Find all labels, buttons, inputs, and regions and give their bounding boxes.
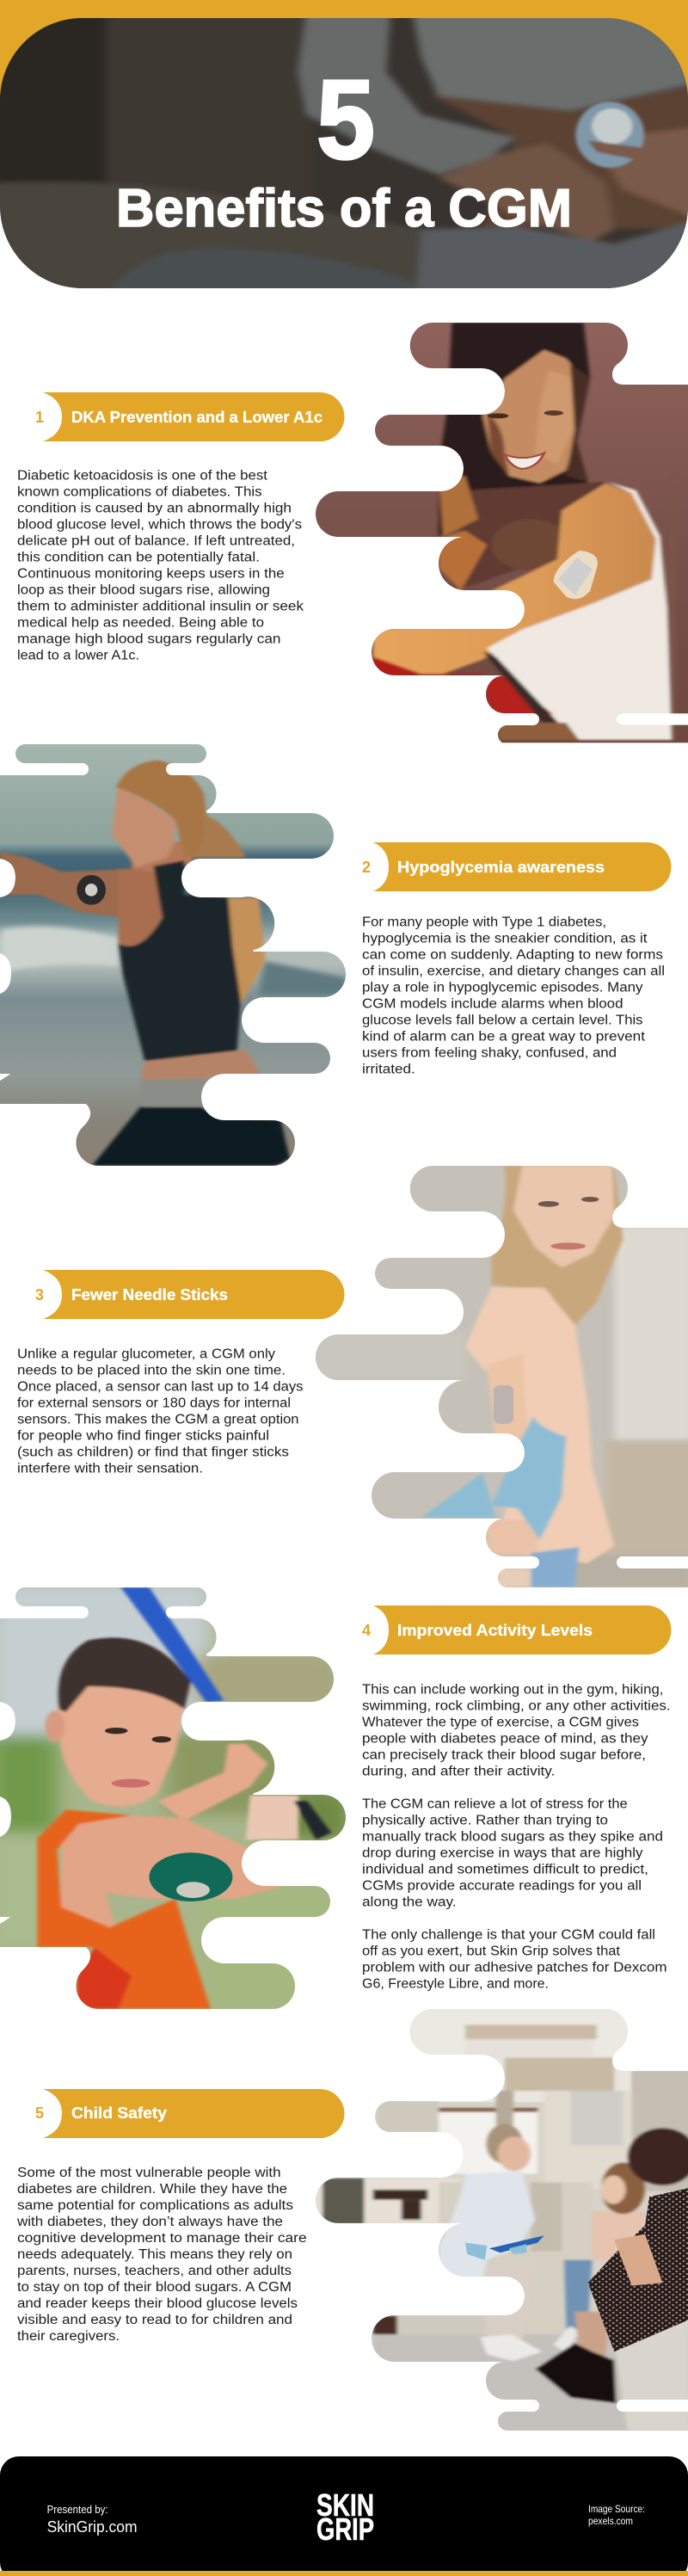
title: 5: 5: [316, 56, 375, 182]
heading 3: [35, 1270, 344, 1319]
body text 5: diabetes are children. While they have the: [17, 2182, 287, 2197]
heading 1: [35, 392, 344, 441]
body text 3: Once placed, a sensor can last up to 14 days: [17, 1379, 304, 1394]
presented by: SkinGrip.com: [47, 2518, 138, 2536]
icon: sensor: [575, 102, 654, 168]
photo panel 4: boy with baseball bat and sensor: [0, 1583, 353, 2013]
image source: Image Source:: [588, 2503, 645, 2515]
body text 2: glucose levels fall below a certain level. This: [362, 1014, 643, 1028]
body text 2: [362, 915, 665, 1077]
heading 4: [362, 1605, 671, 1655]
body text 4: during, and after their activity.: [362, 1764, 555, 1778]
logo: Skin Grip: GRIP: [316, 2511, 374, 2547]
body text 1: loop as their blood sugars rise, allowing: [17, 583, 270, 598]
heading 3: Fewer Needle Sticks: [71, 1286, 228, 1303]
title: Benefits of a CGM: Benefits of a CGM: [116, 179, 572, 238]
body text 3: for people who find finger sticks painful: [17, 1428, 269, 1443]
body text 4: Whatever the type of exercise, a CGM gives: [362, 1715, 639, 1729]
body text 2: irritated.: [362, 1063, 415, 1077]
body text 4: G6, Freestyle Libre, and more.: [362, 1976, 549, 1991]
body text 5: [16, 2166, 307, 2344]
face details: [538, 1197, 599, 1249]
icon: arm sensor: [554, 551, 598, 599]
footer: [0, 2456, 688, 2576]
body text 1: them to administer additional insulin or seek: [17, 600, 304, 614]
body text 1: lead to a lower A1c.: [17, 649, 139, 663]
body text 4: problem with our adhesive patches for Dexcom: [362, 1960, 667, 1975]
body text 4: [362, 1682, 671, 1991]
body text 2: play a role in hypoglycemic episodes. Many: [362, 981, 643, 995]
heading 5: [35, 2089, 344, 2138]
body text 3: [17, 1347, 304, 1476]
body text 5: visible and easy to read to for children and: [17, 2313, 292, 2327]
heading 4: Improved Activity Levels: [397, 1622, 593, 1639]
face details: [105, 1728, 171, 1788]
body text 1: Diabetic ketoacidosis is one of the best: [17, 469, 268, 484]
body text 2: users from feeling shaky, confused, and: [362, 1046, 617, 1061]
heading 2: Hypoglycemia awareness: [397, 859, 605, 876]
body text 5: parents, nurses, teachers, and other adults: [17, 2264, 292, 2278]
heading 4: 4: [362, 1622, 371, 1639]
body text 3: needs to be placed into the skin one time.: [17, 1363, 286, 1377]
image source: pexels.com: [588, 2515, 633, 2527]
presented by: [47, 2503, 138, 2536]
body text 4: This can include working out in the gym, hiking,: [362, 1682, 663, 1697]
body text 3: sensors. This makes the CGM a great option: [17, 1412, 299, 1427]
body text 2: hypoglycemia is the sneakier condition, as it: [362, 932, 648, 946]
body text 2: CGM models include alarms when blood: [362, 997, 623, 1012]
body text 1: Continuous monitoring keeps users in the: [17, 567, 285, 582]
body text 4: swimming, rock climbing, or any other activities.: [362, 1698, 671, 1713]
heading 5: 5: [35, 2105, 44, 2122]
body text 1: medical help as needed. Being able to: [17, 616, 264, 631]
body text 1: delicate pH out of balance. If left untreated,: [17, 534, 295, 549]
body text 1: this condition can be potentially fatal.: [17, 551, 260, 565]
body text 1: manage high blood sugars regularly can: [17, 632, 280, 647]
logo: Skin Grip: [316, 2487, 374, 2547]
body text 5: same potential for complications as adults: [17, 2198, 293, 2213]
body text 4: physically active. Rather than trying to: [362, 1813, 608, 1827]
body text 4: The only challenge is that your CGM could fall: [362, 1927, 655, 1942]
header background band: [0, 0, 688, 112]
body text 5: Some of the most vulnerable people with: [17, 2166, 280, 2180]
body text 1: known complications of diabetes. This: [17, 485, 262, 500]
photo panel 1: woman wearing arm sensor: [307, 318, 688, 743]
body text 3: Unlike a regular glucometer, a CGM only: [17, 1347, 275, 1361]
body text 4: off as you exert, but Skin Grip solves that: [362, 1944, 621, 1958]
body text 4: drop during exercise in ways that are highly: [362, 1846, 643, 1860]
body text 5: to stay on top of their blood sugars. A CGM: [17, 2280, 292, 2295]
heading 2: 2: [362, 859, 371, 876]
body text 5: and reader keeps their blood glucose levels: [17, 2296, 298, 2311]
clipboard and gloves: [465, 2235, 544, 2260]
photo panel 2: woman exercising on beach: [0, 740, 353, 1170]
body text 2: of insulin, exercise, and dietary changes can all: [362, 964, 665, 979]
body text 2: can come on suddenly. Adapting to new forms: [362, 948, 663, 963]
header photo: hands applying sensor: [0, 11, 688, 295]
header: hero photo with title: [0, 11, 688, 295]
heading 2: [362, 842, 671, 891]
body text 2: kind of alarm can be a great way to prevent: [362, 1030, 646, 1045]
icon: arm sensor: [77, 875, 106, 905]
logo: Skin Grip: SKIN: [316, 2487, 374, 2523]
body text 1: condition is caused by an abnormally high: [17, 502, 292, 516]
heading 3: 3: [35, 1286, 44, 1303]
dotted dress: [588, 2188, 688, 2351]
body text 4: individual and sometimes difficult to predict,: [362, 1862, 648, 1877]
body text 4: CGMs provide accurate readings for you all: [362, 1878, 642, 1893]
body text 2: For many people with Type 1 diabetes,: [362, 915, 606, 930]
icon: green patch and sensor: [149, 1852, 232, 1901]
body text 4: along the way.: [362, 1895, 457, 1909]
arm of the mother: [614, 2234, 662, 2286]
body text 1: [17, 469, 304, 663]
presented by: Presented by:: [47, 2503, 108, 2516]
photo panel 3: girl receiving a sensor: [307, 1162, 688, 1592]
heading 1: 1: [35, 409, 44, 426]
body text 1: blood glucose level, which throws the body's: [17, 518, 302, 533]
body text 4: manually track blood sugars as they spike and: [362, 1829, 663, 1844]
image source: [588, 2503, 645, 2527]
body text 5: cognitive development to manage their care: [17, 2231, 307, 2246]
body text 5: their caregivers.: [17, 2329, 120, 2344]
body text 3: interfere with their sensation.: [17, 1461, 203, 1476]
body text 4: The CGM can relieve a lot of stress for the: [362, 1796, 628, 1811]
body text 4: can precisely track their blood sugar before,: [362, 1747, 646, 1762]
face details: [488, 410, 563, 469]
body text 3: for external sensors or 180 days for internal: [17, 1396, 291, 1410]
heading 5: Child Safety: [71, 2105, 167, 2122]
photo panel 5: doctor with mother and child: [307, 2005, 688, 2435]
body text 5: needs adequately. This means they rely on: [17, 2247, 292, 2262]
body text 3: (such as children) or find that finger sticks: [17, 1445, 289, 1459]
body text 4: people with diabetes peace of mind, as they: [362, 1731, 648, 1746]
body text 5: with diabetes, they don’t always have the: [16, 2215, 283, 2229]
icon: arm sensor: [494, 1385, 513, 1424]
heading 1: DKA Prevention and a Lower A1c: [71, 409, 322, 426]
